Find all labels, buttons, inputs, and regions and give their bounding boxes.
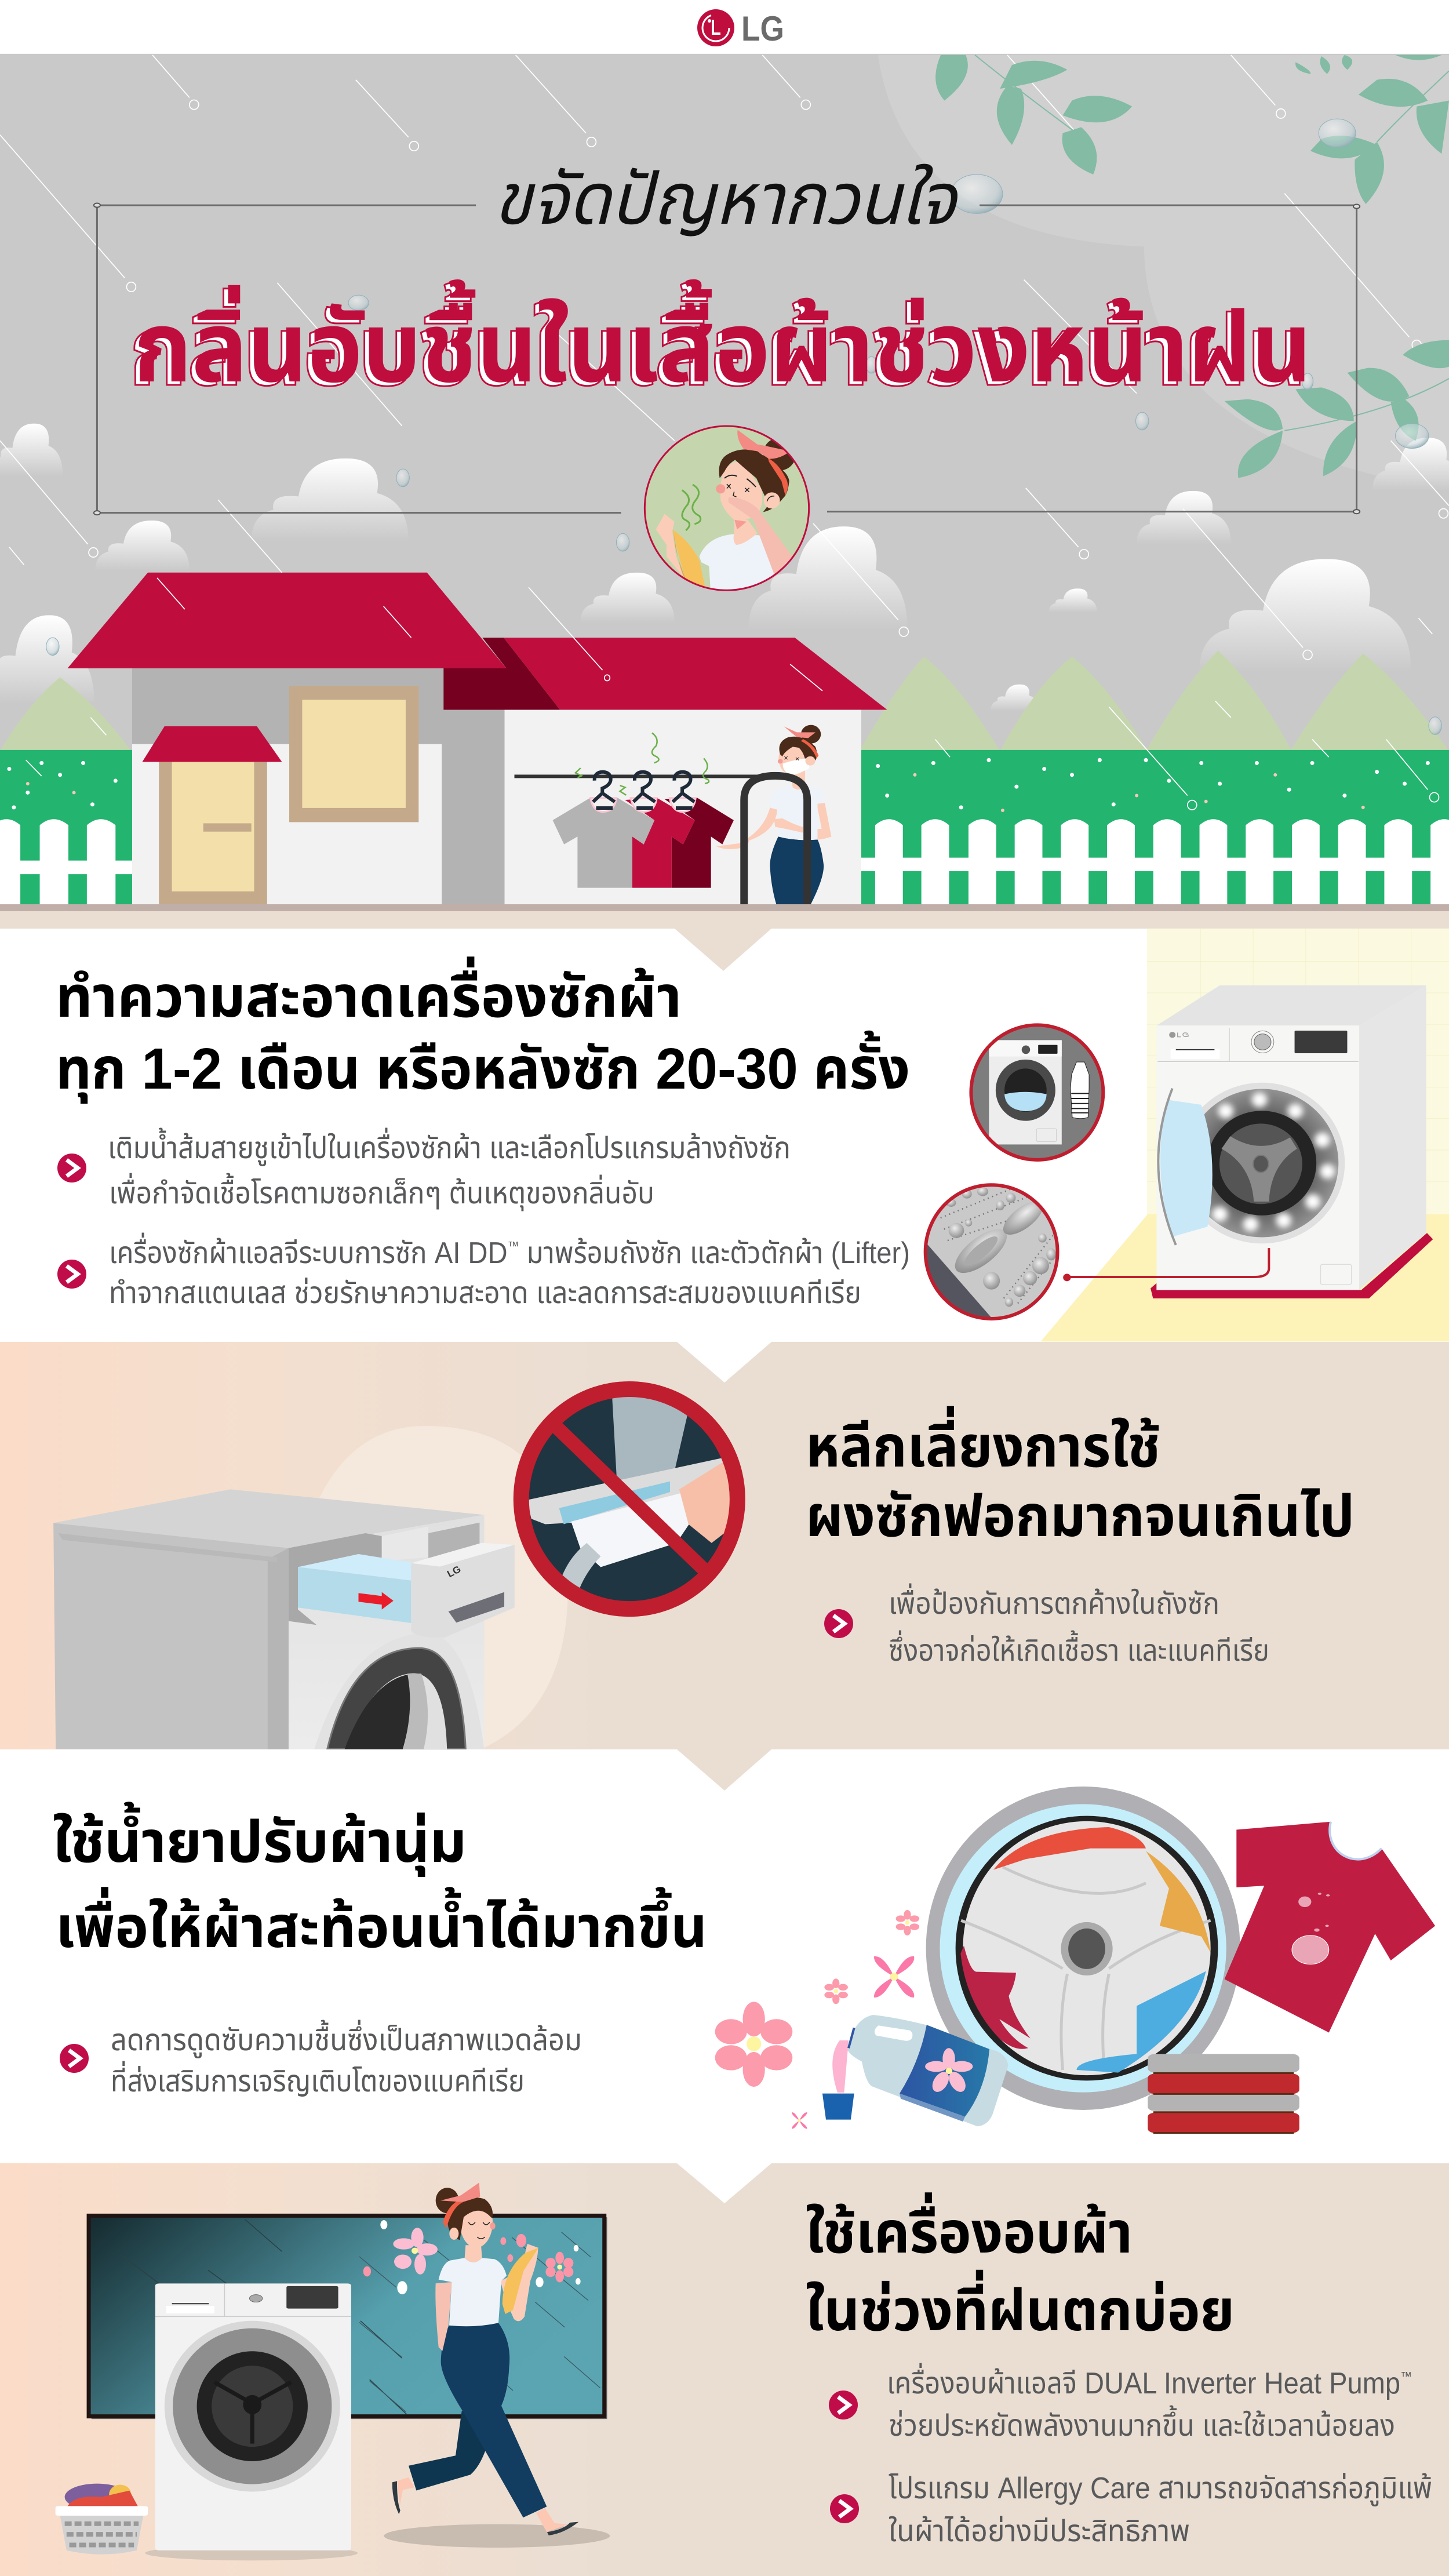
window with rain bbox=[89, 2215, 607, 2419]
bullet: heat pump: เครื่องอบผ้าแอลจี DUAL Inverter Heat Pump bbox=[887, 2367, 1449, 2400]
portrait: woman smelling towel bbox=[645, 426, 809, 597]
rain bbox=[0, 55, 1449, 810]
bullet: residue bbox=[824, 1583, 1269, 1668]
heading: ผงซักฟอกมากจนเกินไป bbox=[806, 1484, 1355, 1549]
dryer bbox=[145, 2283, 358, 2560]
bullet: AI DD tip: ™ bbox=[508, 1239, 519, 1253]
heading bbox=[806, 1406, 1355, 1549]
icon: prohibited sign bbox=[514, 1382, 753, 1616]
bullet: allergy care: ในผ้าได้อย่างมีประสิทธิภาพ bbox=[889, 2515, 1190, 2548]
hedge bbox=[0, 750, 1449, 905]
water drops bbox=[46, 119, 1441, 734]
leaves bbox=[935, 55, 1449, 478]
bullet: vinegar tip: เติมน้ำส้มสายชูเข้าไปในเครื่องซักผ้า และเลือกโปรแกรมล้างถังซัก bbox=[108, 1127, 791, 1166]
panel: rainy hero scene bbox=[0, 54, 1449, 905]
heading: ทุก 1-2 เดือน หรือหลังซัก 20-30 ครั้ง bbox=[56, 1030, 910, 1104]
flowers in window bbox=[359, 2220, 600, 2412]
folded clothes stack bbox=[1148, 2054, 1299, 2133]
heading bbox=[56, 956, 910, 1104]
bullet: absorption: ลดการดูดซับความชื้นซึ่งเป็นสภาพแวดล้อม bbox=[111, 2020, 582, 2058]
woman with mask beside rail bbox=[716, 725, 831, 905]
woman walking with towel bbox=[384, 2182, 610, 2548]
panel: use softener bbox=[0, 1749, 1449, 2163]
heading: ทำความสะอาดเครื่องซักผ้า bbox=[56, 956, 682, 1029]
panel: header with LG logo bbox=[0, 0, 1449, 55]
clouds bbox=[0, 424, 1449, 711]
panel: use a dryer bbox=[0, 2163, 1449, 2576]
washer illustration bbox=[1040, 929, 1449, 1341]
heading: หลีกเลี่ยงการใช้ bbox=[806, 1406, 1160, 1479]
white picket fence bbox=[0, 819, 1449, 905]
heading bbox=[806, 2192, 1235, 2343]
house bbox=[67, 573, 887, 905]
title frame bbox=[94, 203, 1360, 515]
panel: avoid too much detergent bbox=[0, 1342, 1449, 1749]
crimson cloth in drum bbox=[960, 1946, 1031, 2049]
bullet: AI DD tip: ทำจากสแตนเลส ช่วยรักษาความสะอาด และลดการสะสมของแบคทีเรีย bbox=[109, 1276, 861, 1310]
heading: ใช้น้ำยาปรับผ้านุ่ม bbox=[53, 1802, 467, 1877]
bullet: vinegar tip bbox=[57, 1127, 791, 1211]
pale backdrop circle bbox=[282, 1426, 568, 1749]
bullet: heat pump bbox=[829, 2363, 1412, 2443]
hero subtitle: ขจัดปัญหากวนใจ bbox=[494, 159, 958, 239]
bullet: AI DD tip: เครื่องซักผ้าแอลจีระบบการซัก AI DD bbox=[109, 1236, 548, 1270]
heading: เพื่อให้ผ้าสะท้อนน้ำได้มากขึ้น bbox=[56, 1887, 707, 1960]
detail circle: stainless drum lifter bbox=[916, 1184, 1060, 1320]
bullet: heat pump: ช่วยประหยัดพลังงานมากขึ้น และใช้เวลาน้อยลง bbox=[889, 2405, 1395, 2443]
LG mark on drawer: LG bbox=[445, 1563, 463, 1580]
bullet: heat pump: ™ bbox=[1400, 2369, 1412, 2384]
mountains bbox=[0, 650, 1449, 751]
detail circle: vinegar in washer bbox=[970, 1024, 1105, 1161]
bullet: absorption bbox=[60, 2020, 582, 2098]
bullet: allergy care bbox=[830, 2472, 1432, 2548]
bullet: residue: เพื่อป้องกันการตกค้างในถังซัก bbox=[889, 1583, 1219, 1621]
icon: red t-shirt with water drops bbox=[1225, 1822, 1435, 2032]
bullet: AI DD tip: มาพร้อมถังซัก และตัวตักผ้า (Lifter) bbox=[519, 1236, 910, 1270]
bullet: AI DD tip bbox=[57, 1232, 910, 1310]
hero title: กลิ่นอับชื้นในเสื้อผ้าช่วงหน้าฝน bbox=[129, 282, 1307, 406]
drum illustration bbox=[926, 1787, 1240, 2110]
heading: ในช่วงที่ฝนตกบ่อย bbox=[806, 2270, 1235, 2343]
heading: ใช้เครื่องอบผ้า bbox=[806, 2192, 1133, 2265]
laundry basket bbox=[56, 2484, 148, 2555]
panel: header with LG logo: LG bbox=[741, 9, 784, 48]
drying shirts on rail bbox=[515, 733, 760, 888]
bullet: vinegar tip: เพื่อกำจัดเชื้อโรคตามซอกเล็กๆ ต้นเหตุของกลิ่นอับ bbox=[109, 1173, 654, 1211]
washer with detergent drawer bbox=[53, 1489, 515, 1749]
bullet: residue: ซึ่งอาจก่อให้เกิดเชื้อรา และแบคทีเรีย bbox=[889, 1630, 1269, 1668]
softener bottle and flowers bbox=[715, 1910, 1009, 2129]
bullet: absorption: ที่ส่งเสริมการเจริญเติบโตของแบคทีเรีย bbox=[111, 2061, 525, 2098]
ground stripe bbox=[0, 904, 1449, 929]
panel: clean the washer bbox=[0, 929, 1449, 1342]
hero title: กลิ่นอับชื้นในเสื้อผ้าช่วงหน้าฝน bbox=[134, 279, 1312, 403]
heading bbox=[53, 1802, 707, 1960]
